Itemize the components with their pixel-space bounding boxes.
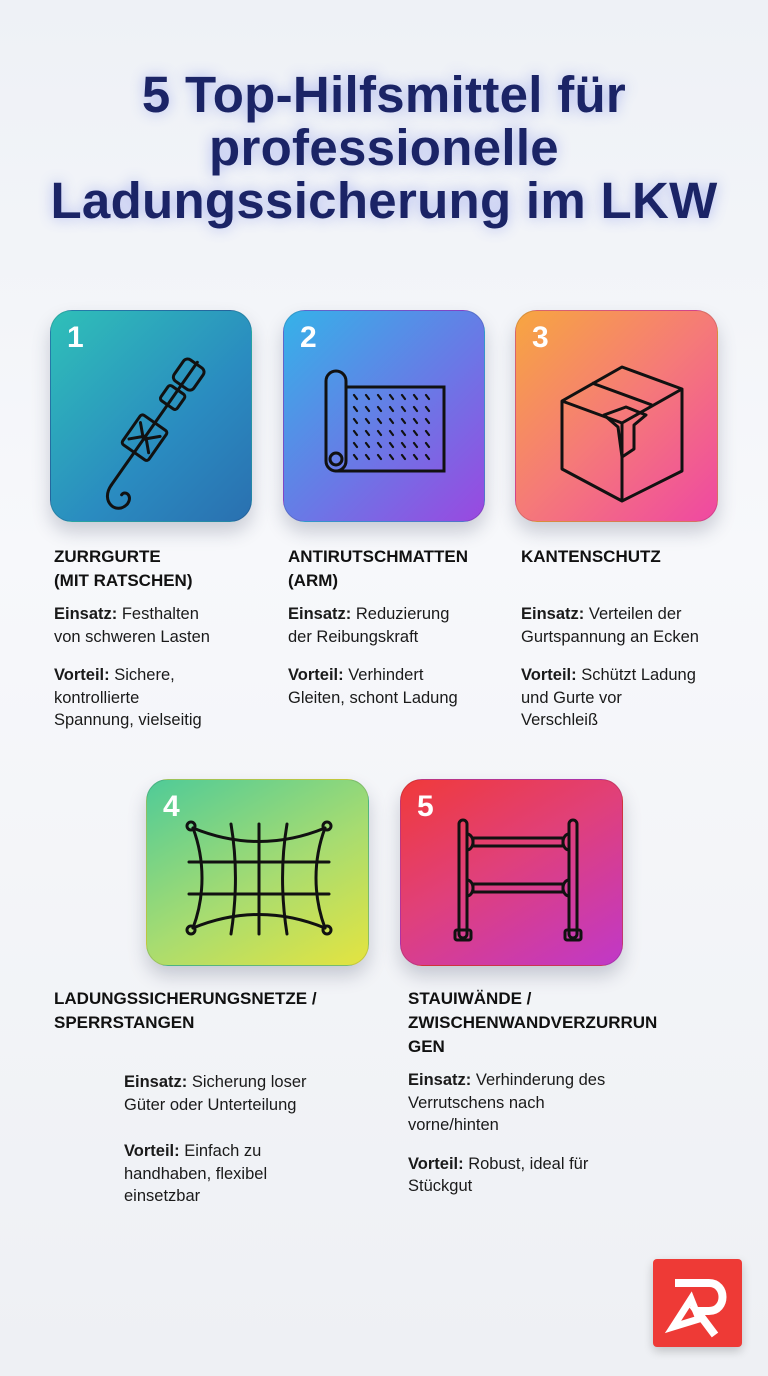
text 2: ANTIRUTSCHMATTEN — [288, 547, 468, 566]
text 2 — [288, 547, 468, 706]
text 3: Vorteil: Schützt Ladung — [521, 666, 696, 684]
card 2: anti-slip mat — [283, 310, 485, 522]
card 3: edge protector: 3 — [532, 321, 549, 354]
card 2: anti-slip mat: 2 — [300, 321, 317, 354]
text 5: vorne/hinten — [408, 1116, 499, 1134]
text 3: Einsatz: Verteilen der — [521, 605, 682, 623]
card 1: ratchet strap — [50, 310, 252, 522]
text 4: Güter oder Unterteilung — [124, 1096, 296, 1114]
card 4: net: 4 — [163, 790, 180, 823]
text 4: SPERRSTANGEN — [54, 1013, 194, 1032]
text 3: Verschleiß — [521, 711, 598, 729]
text 1: ZURRGURTE — [54, 547, 161, 566]
icon: mat roll — [324, 370, 446, 472]
text 5: Vorteil: Robust, ideal für — [408, 1154, 588, 1172]
text 3: Gurtspannung an Ecken — [521, 628, 699, 646]
text 2: Vorteil: Verhindert — [288, 666, 423, 684]
text 1: Spannung, vielseitig — [54, 711, 202, 729]
card 1: ratchet strap: 1 — [67, 321, 84, 354]
text 4: Vorteil: Einfach zu — [124, 1142, 261, 1160]
icon: box with corner — [560, 366, 684, 502]
text 2: (ARM) — [288, 571, 338, 590]
text 3 — [521, 547, 699, 729]
card 5: bulkhead: 5 — [417, 790, 434, 823]
text 5: Stückgut — [408, 1177, 472, 1195]
text 2: der Reibungskraft — [288, 628, 418, 646]
text 4: LADUNGSSICHERUNGSNETZE / — [54, 989, 317, 1008]
text 1 — [54, 547, 210, 729]
logo — [653, 1259, 742, 1347]
text 2: Einsatz: Reduzierung — [288, 605, 449, 623]
text 5 — [408, 989, 657, 1195]
title: 5 Top-Hilfsmittel für — [142, 66, 626, 123]
text 3: KANTENSCHUTZ — [521, 547, 661, 566]
icon: bulkhead bars — [454, 818, 582, 942]
text 4: einsetzbar — [124, 1187, 200, 1205]
card 4: net — [146, 779, 369, 966]
text 1: kontrollierte — [54, 688, 139, 706]
text 1: (MIT RATSCHEN) — [54, 571, 192, 590]
card 3: edge protector — [515, 310, 718, 522]
text 5: GEN — [408, 1037, 445, 1056]
text 3: und Gurte vor — [521, 688, 622, 706]
text 4 — [54, 989, 317, 1205]
title: professionelle — [209, 119, 559, 176]
title: Ladungssicherung im LKW — [50, 172, 718, 229]
text 4: Einsatz: Sicherung loser — [124, 1073, 306, 1091]
title — [46, 66, 722, 235]
text 1: Einsatz: Festhalten — [54, 605, 199, 623]
text 5: ZWISCHENWANDVERZURRUN — [408, 1013, 657, 1032]
text 1: von schweren Lasten — [54, 628, 210, 646]
icon: ratchet strap — [106, 358, 206, 510]
text 4: handhaben, flexibel — [124, 1164, 267, 1182]
text 1: Vorteil: Sichere, — [54, 666, 175, 684]
text 5: STAUIWÄNDE / — [408, 989, 531, 1008]
text 2: Gleiten, schont Ladung — [288, 688, 458, 706]
text 5: Einsatz: Verhinderung des — [408, 1071, 605, 1089]
card 5: bulkhead — [400, 779, 623, 966]
icon: net — [186, 820, 332, 936]
text 5: Verrutschens nach — [408, 1094, 545, 1112]
